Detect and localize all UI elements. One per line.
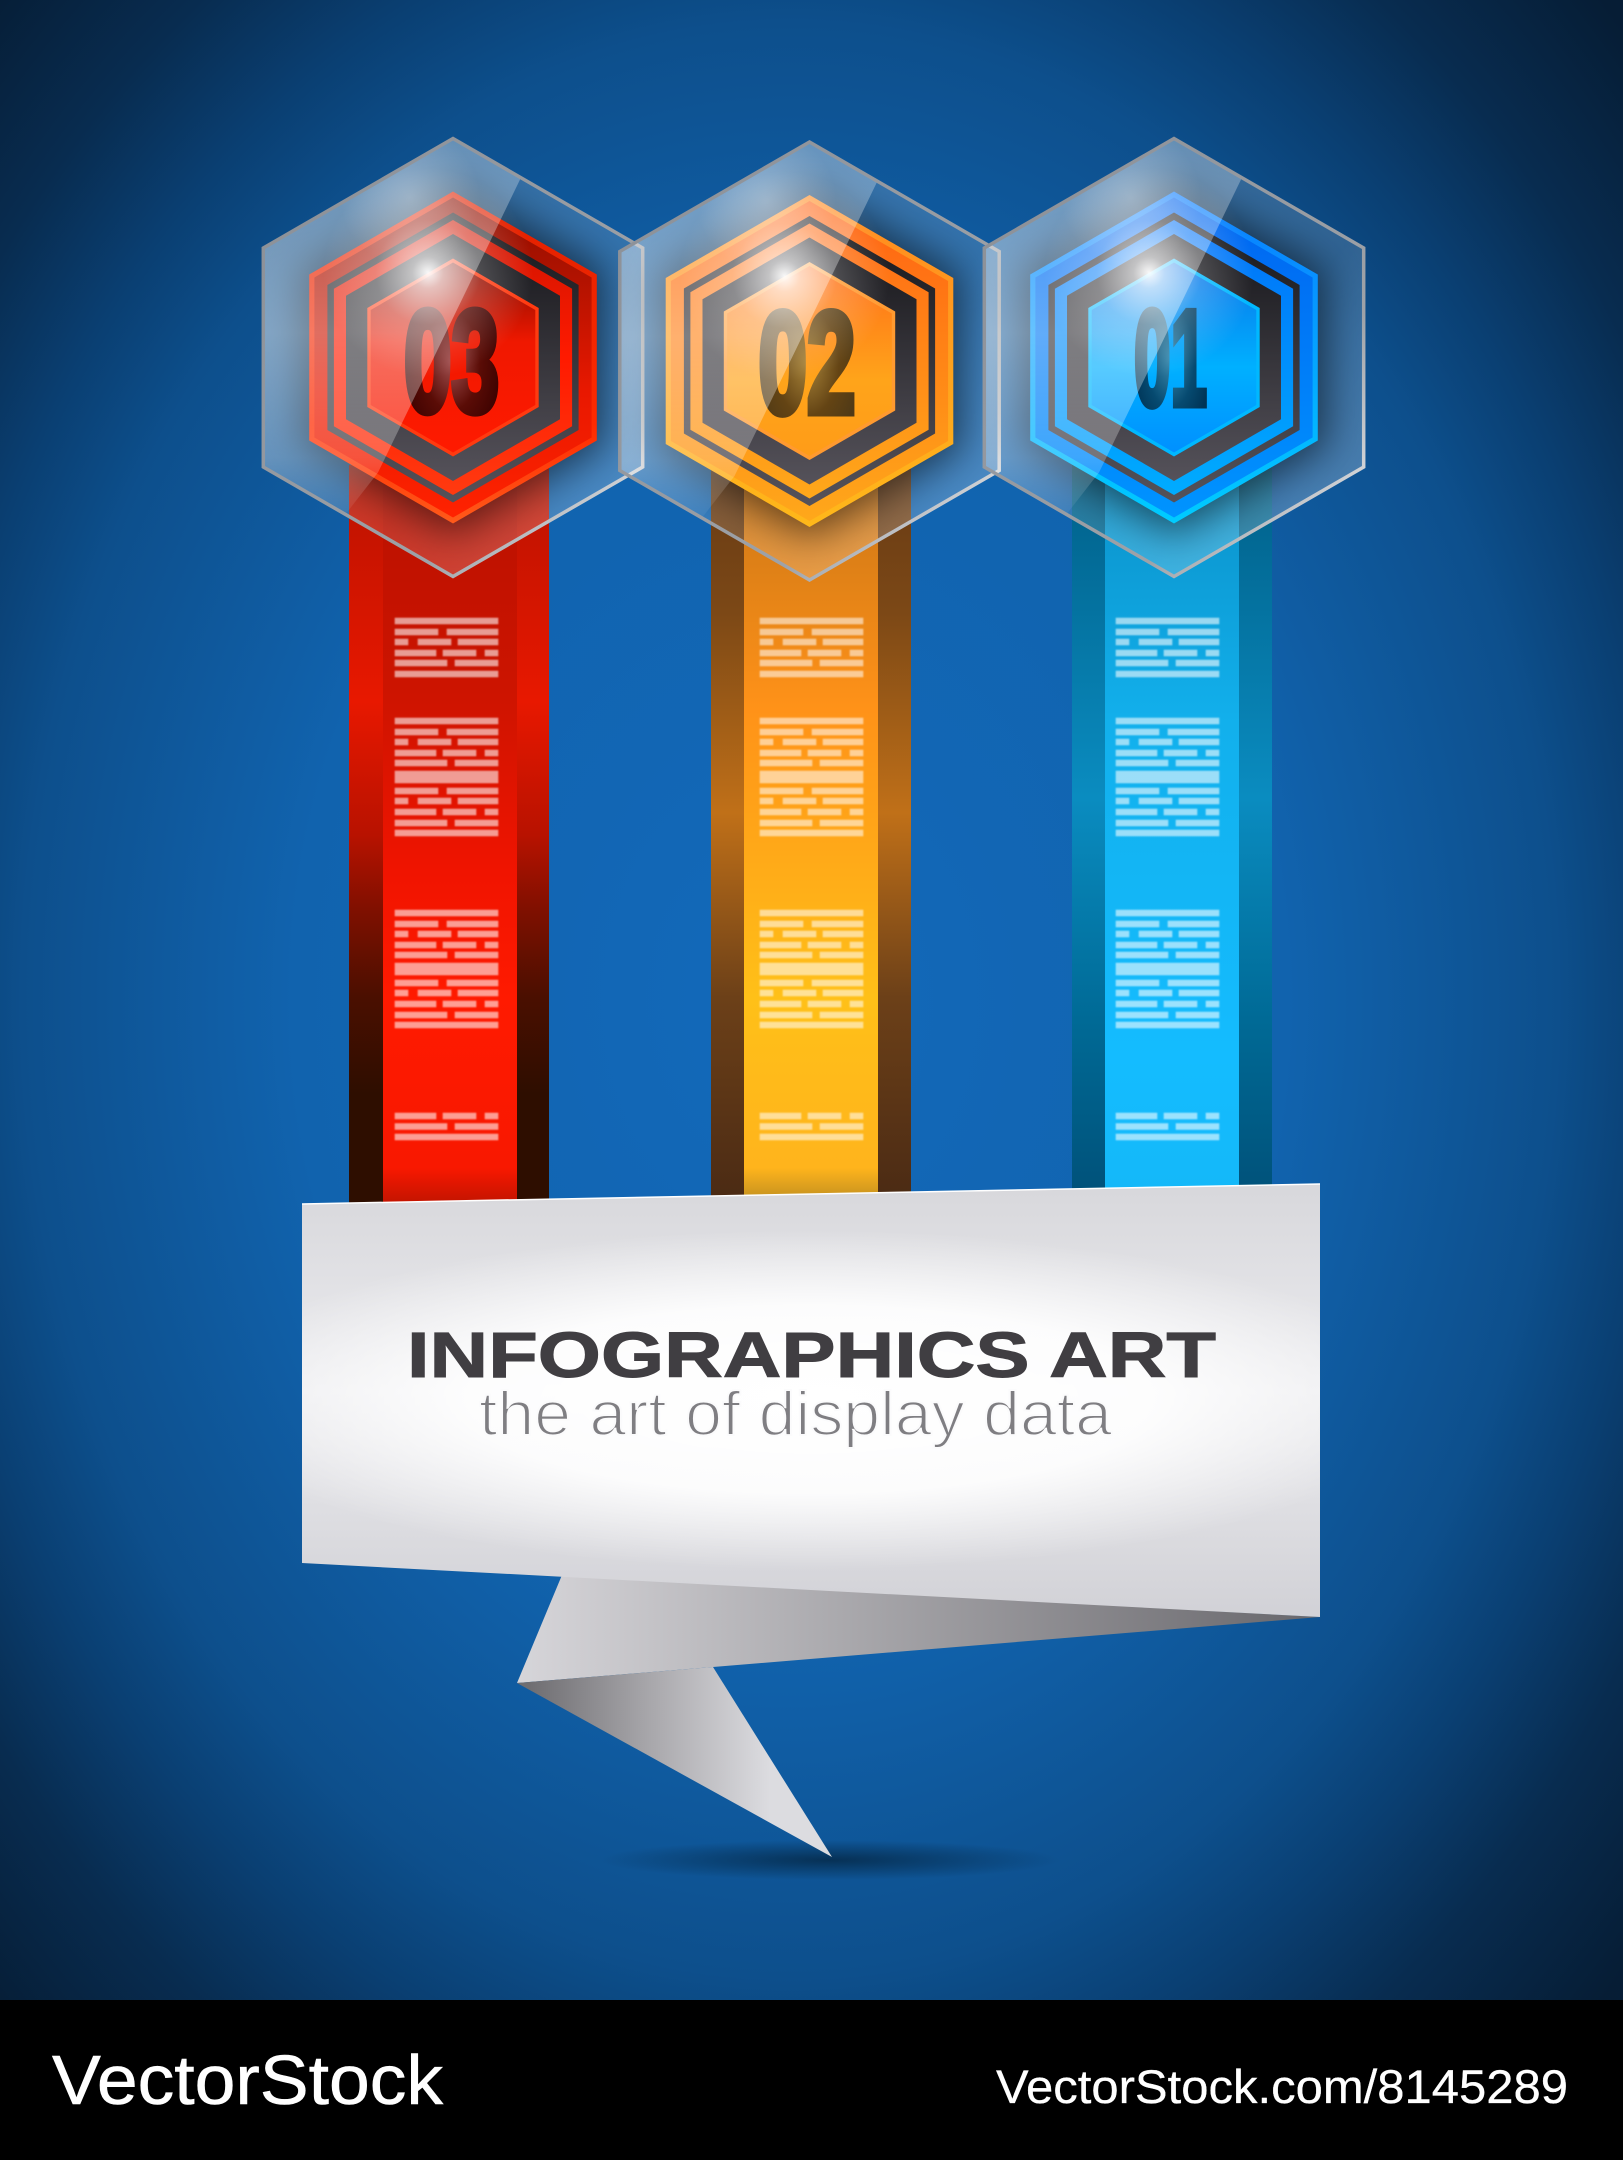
footer bar bbox=[0, 2000, 1623, 2160]
hexagon badge 02 bbox=[620, 131, 999, 580]
ribbon text lines: orange bbox=[760, 618, 863, 1140]
ribbon: red bbox=[349, 465, 549, 1207]
ribbon: orange bbox=[711, 465, 911, 1207]
number 03: 03 bbox=[404, 281, 499, 442]
banner tail bbox=[517, 1667, 832, 1857]
ribbon text lines: blue bbox=[1116, 618, 1219, 1140]
hexagon badge 03 bbox=[263, 128, 643, 576]
hexagon badge 01: 01 bbox=[1134, 282, 1207, 434]
title: INFOGRAPHICS ART bbox=[407, 1319, 1216, 1391]
subtitle: the art of display data bbox=[479, 1380, 1113, 1449]
glass reflection bbox=[620, 131, 890, 521]
footer logo: VectorStock bbox=[52, 2041, 444, 2119]
ribbon: blue bbox=[1072, 465, 1272, 1207]
glass reflection bbox=[984, 128, 1254, 518]
banner fold bbox=[517, 1575, 1320, 1683]
ground shadow under banner tip bbox=[600, 1840, 1060, 1880]
origami banner bbox=[302, 1184, 1320, 1857]
glass reflection bbox=[263, 128, 533, 518]
banner main panel bbox=[302, 1184, 1320, 1617]
number 02: 02 bbox=[758, 282, 856, 444]
hexagon badge 01 bbox=[984, 128, 1364, 576]
footer image id: VectorStock.com/8145289 bbox=[996, 2060, 1568, 2113]
ribbon text lines: red bbox=[395, 618, 498, 1140]
